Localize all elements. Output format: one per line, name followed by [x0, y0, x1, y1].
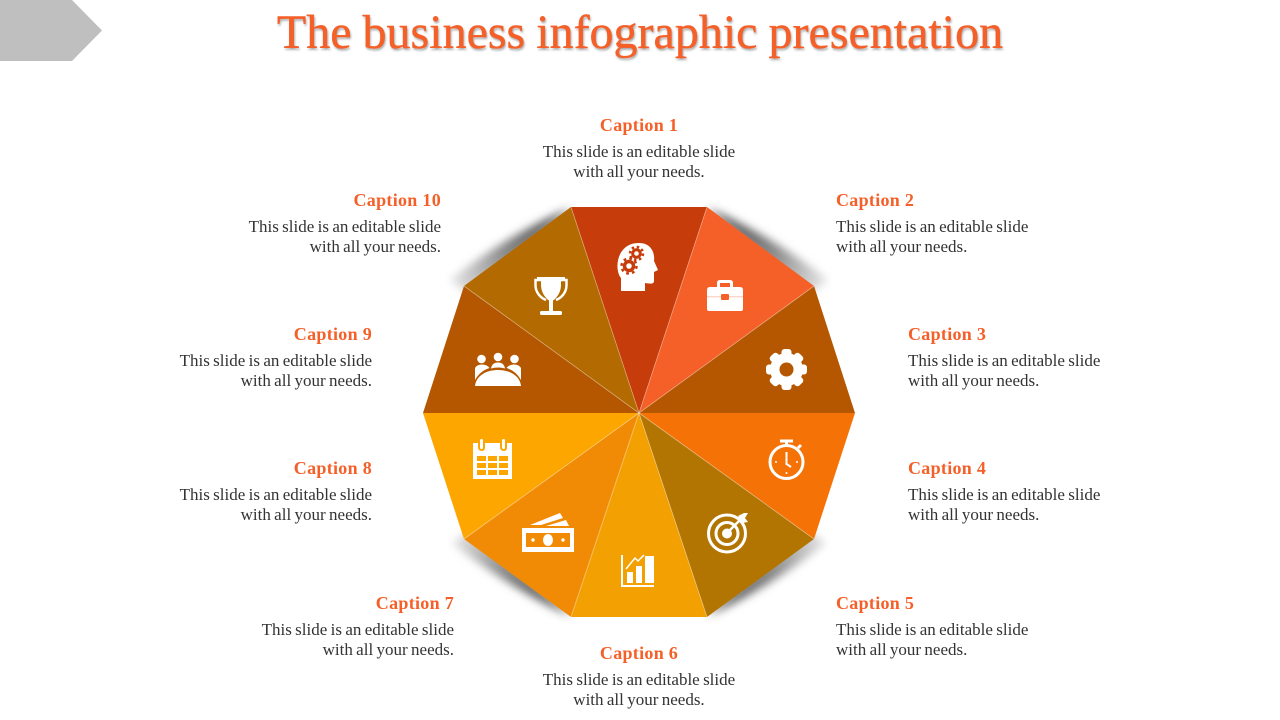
caption 7: with all your needs.: [323, 640, 454, 659]
decorative arrow tab: [0, 0, 102, 61]
caption 6: [543, 643, 735, 709]
wedge 9: [423, 286, 639, 413]
caption 5: with all your needs.: [836, 640, 967, 659]
caption 5: Caption 5: [836, 593, 914, 613]
caption 7: This slide is an editable slide: [262, 620, 454, 639]
icon: stopwatch: [770, 441, 803, 478]
caption 6: with all your needs.: [573, 690, 705, 709]
caption 10: [248, 190, 441, 256]
caption 7: [262, 593, 454, 659]
caption 8: Caption 8: [294, 458, 372, 478]
icon: target: [708, 513, 748, 552]
caption 9: with all your needs.: [241, 371, 372, 390]
caption 2: This slide is an editable slide: [836, 217, 1028, 236]
caption 8: This slide is an editable slide: [180, 485, 372, 504]
caption 6: This slide is an editable slide: [543, 670, 735, 689]
caption 10: with all your needs.: [310, 237, 441, 256]
wedge 1: [571, 207, 707, 413]
caption 1: Caption 1: [600, 115, 678, 135]
icon: trophy: [536, 277, 566, 315]
icon: banknotes: [522, 513, 574, 552]
caption 3: This slide is an editable slide: [908, 351, 1100, 370]
caption 1: [543, 115, 735, 181]
icon: bar chart: [621, 555, 654, 587]
caption 4: Caption 4: [908, 458, 986, 478]
wedge 6: [571, 413, 707, 617]
caption 7: Caption 7: [376, 593, 454, 613]
wedge 5: [639, 413, 814, 617]
wedge 3: [639, 286, 855, 413]
wedge 2: [639, 207, 814, 413]
caption 3: [908, 324, 1100, 390]
caption 1: This slide is an editable slide: [543, 142, 735, 161]
caption 5: [836, 593, 1028, 659]
caption 3: Caption 3: [908, 324, 986, 344]
wedge 10: [464, 207, 639, 413]
title: The business infographic presentation: [277, 6, 1003, 59]
caption 10: This slide is an editable slide: [249, 217, 441, 236]
shadows behind diagonal edges: [450, 208, 828, 616]
caption 8: [180, 458, 372, 524]
caption 1: with all your needs.: [573, 162, 705, 181]
caption 9: This slide is an editable slide: [180, 351, 372, 370]
caption 9: Caption 9: [294, 324, 372, 344]
icon: calendar: [473, 439, 512, 479]
caption 3: with all your needs.: [908, 371, 1039, 390]
caption 6: Caption 6: [600, 643, 678, 663]
icon: people at table: [475, 353, 521, 386]
wedge 7: [464, 413, 639, 617]
caption 4: This slide is an editable slide: [908, 485, 1100, 504]
caption 2: [836, 190, 1028, 256]
caption 2: Caption 2: [836, 190, 914, 210]
wedge 4: [639, 413, 855, 539]
caption 5: This slide is an editable slide: [836, 620, 1028, 639]
caption 4: [908, 458, 1100, 524]
caption 9: [180, 324, 372, 390]
caption 8: with all your needs.: [241, 505, 372, 524]
wedge 8: [423, 413, 639, 539]
icon: gear: [766, 349, 807, 390]
icon: briefcase: [707, 280, 743, 311]
icon: head with gears: [617, 243, 658, 291]
caption 2: with all your needs.: [836, 237, 967, 256]
caption 4: with all your needs.: [908, 505, 1039, 524]
caption 10: Caption 10: [353, 190, 441, 210]
